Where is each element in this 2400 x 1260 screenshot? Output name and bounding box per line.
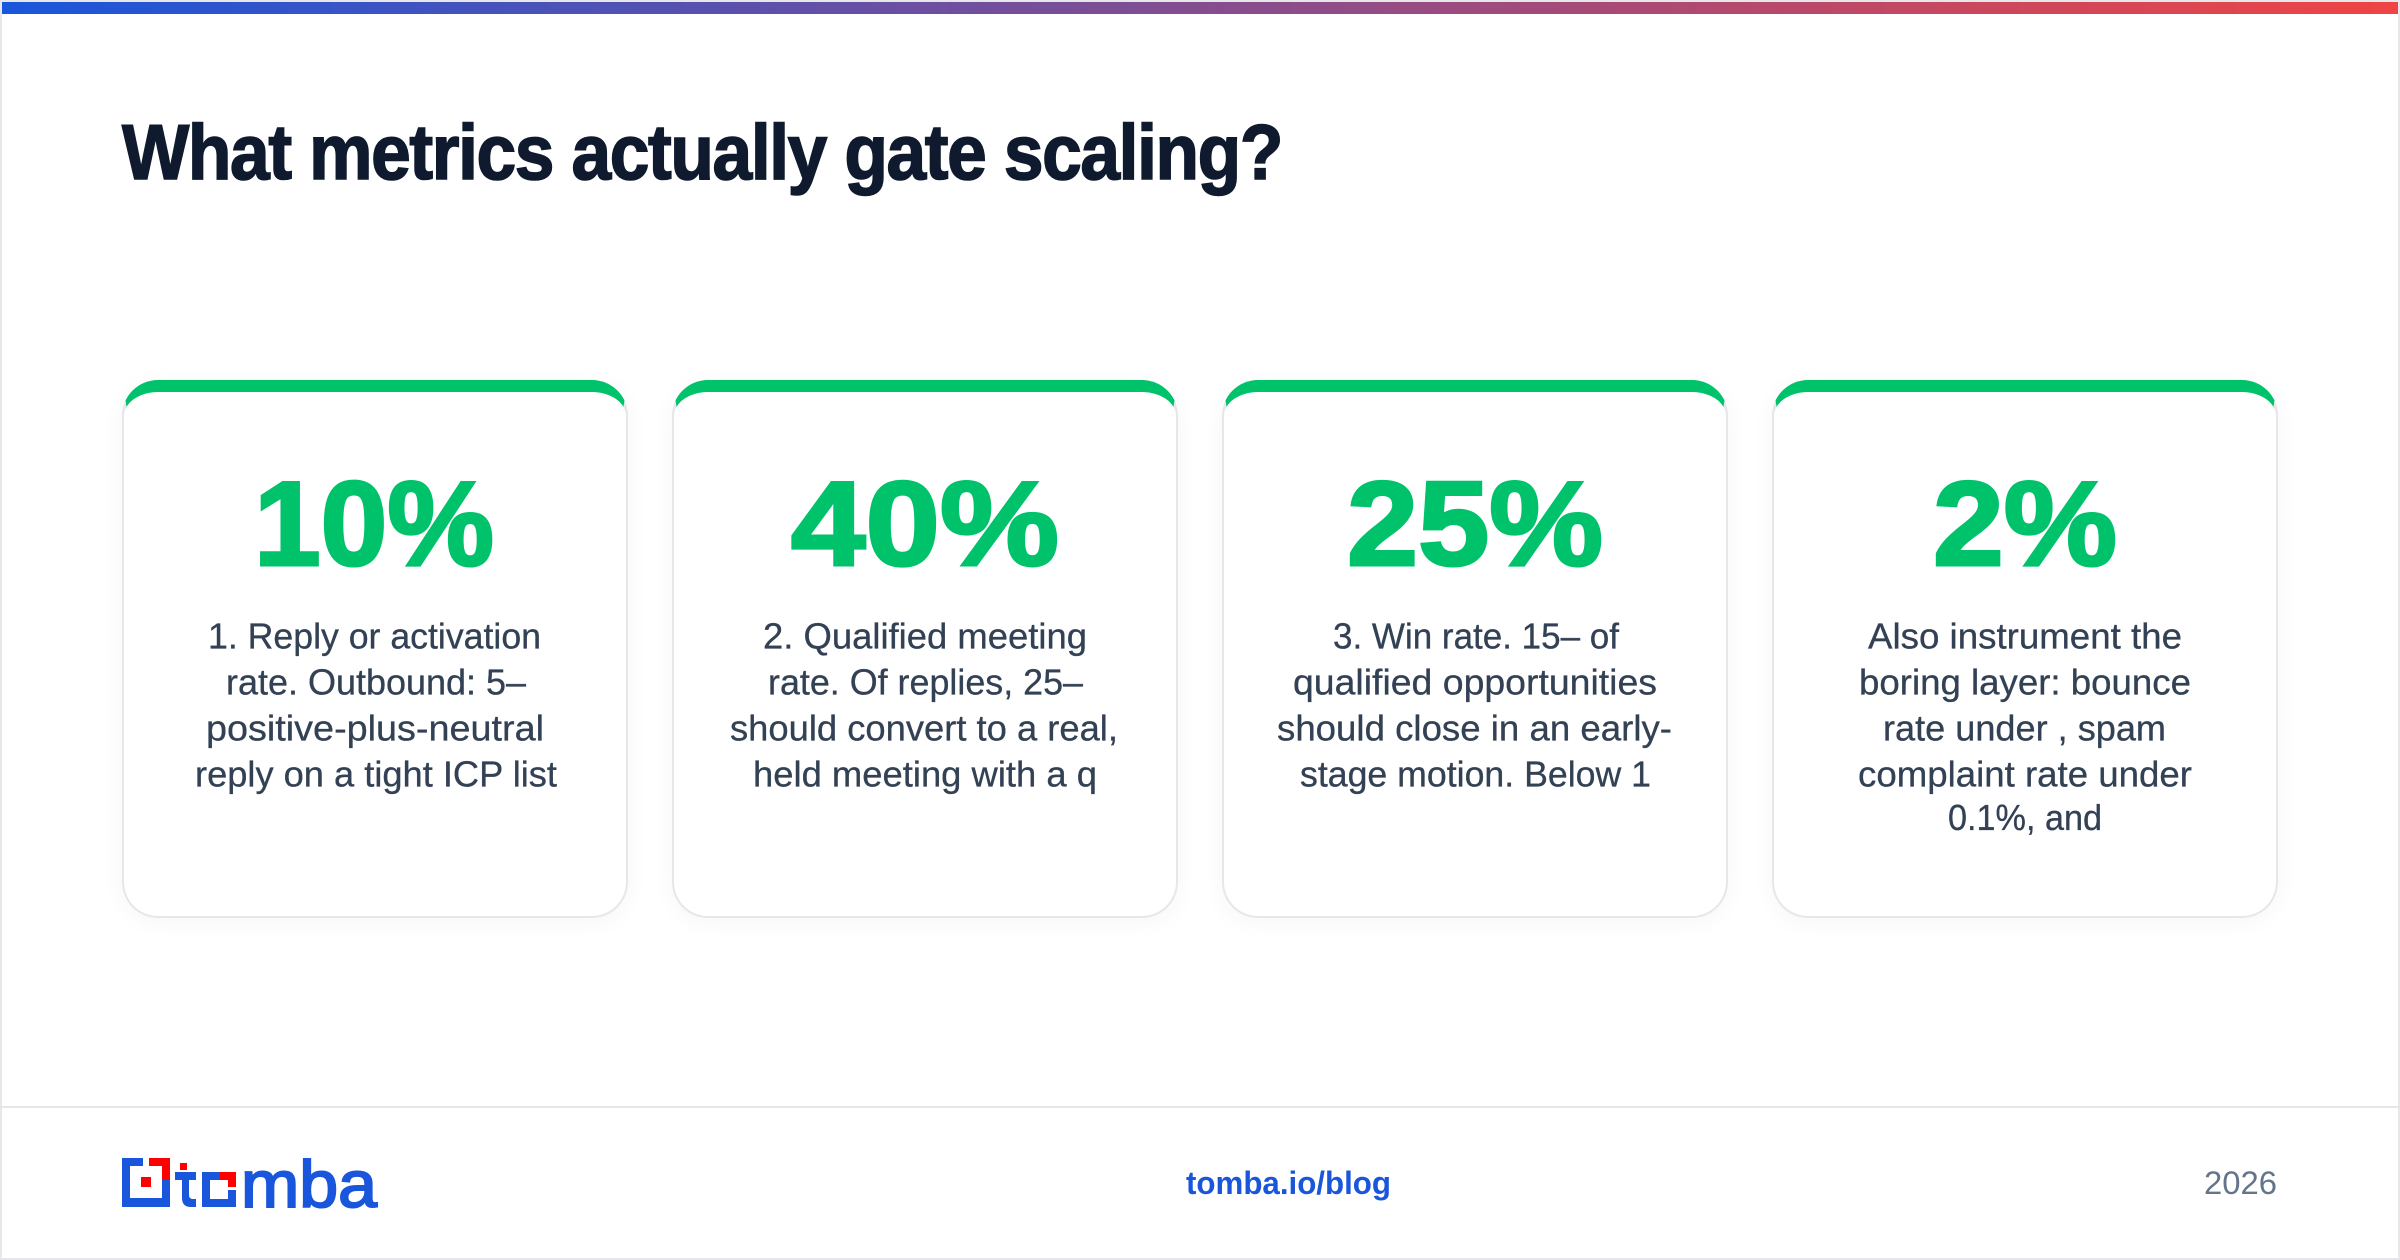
icon: stylised o (202, 1172, 236, 1207)
stat: 2%: 2% (1933, 457, 2117, 591)
description: card 4: complaint rate under (1858, 754, 2192, 794)
panel: card 4 boring layer (1772, 380, 2278, 918)
description: card 1: 1. Reply or activation (208, 616, 541, 656)
stat: 25%: 25% (1347, 457, 1603, 591)
description: card 1: positive-plus-neutral (206, 708, 544, 748)
description: card 1 (195, 616, 557, 794)
footer link: tomba.io/blog (1186, 1165, 1391, 1201)
title: What metrics actually gate scaling? (122, 108, 1282, 196)
description: card 3: stage motion. Below 1 (1300, 754, 1651, 794)
description: card 3 (1277, 616, 1672, 794)
description: card 3: qualified opportunities (1293, 662, 1657, 702)
description: card 1: rate. Outbound: 5– (226, 662, 526, 702)
description: card 2: rate. Of replies, 25– (768, 662, 1083, 702)
top gradient bar (2, 2, 2398, 14)
footer year: 2026 (2204, 1165, 2277, 1201)
description: card 4: Also instrument the (1868, 616, 2182, 656)
panel: card 2 qualified meeting rate (672, 380, 1178, 918)
description: card 2 (730, 616, 1118, 794)
logo: tomba (122, 1147, 378, 1218)
footer divider (2, 1106, 2398, 1108)
icon: stylised t (175, 1163, 196, 1207)
description: card 1: reply on a tight ICP list (195, 754, 557, 794)
description: card 3: 3. Win rate. 15– of (1333, 616, 1620, 656)
panel: card 3 win rate (1222, 380, 1728, 918)
description: card 4 (1858, 616, 2192, 838)
description: card 2: held meeting with a q (753, 754, 1097, 794)
stat: 40%: 40% (791, 457, 1059, 591)
description: card 2: should convert to a real, (730, 708, 1118, 748)
description: card 4: 0.1%, and (1948, 797, 2102, 838)
description: card 4: rate under , spam (1883, 708, 2166, 748)
description: card 3: should close in an early- (1277, 708, 1672, 748)
panel: card 1 reply rate (122, 380, 628, 918)
description: card 4: boring layer: bounce (1859, 662, 2191, 702)
stat: 10%: 10% (254, 457, 494, 591)
icon: logo mark (122, 1158, 170, 1207)
description: card 2: 2. Qualified meeting (763, 616, 1087, 656)
